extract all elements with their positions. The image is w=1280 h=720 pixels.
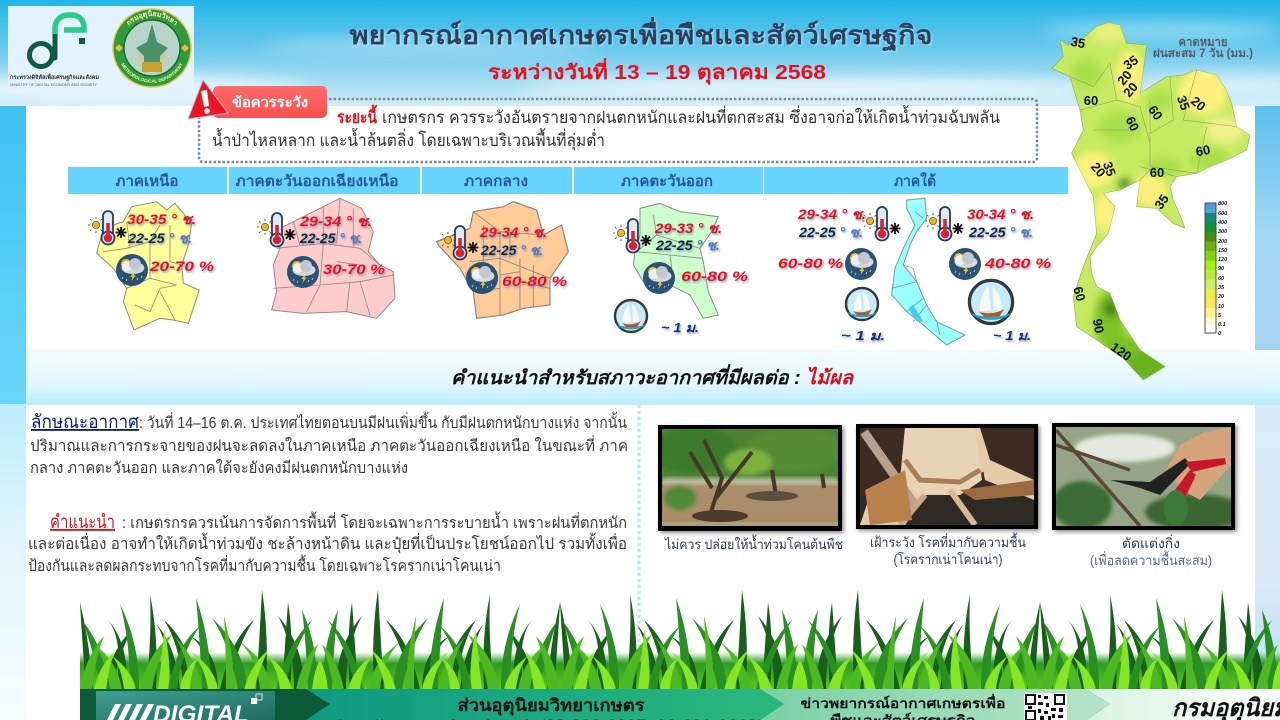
- icon: thermometer: [440, 226, 478, 260]
- map: south: [892, 198, 965, 345]
- warning tag: [213, 86, 327, 118]
- contour labels: 120: [1108, 339, 1134, 364]
- weather text block: ปริมาณและการกระจายของฝนจะลดลงในภาคเหนือ ภาคตะวันออกเฉียงเหนือ ในขณะที่ ภาค: [30, 435, 628, 455]
- map: north: [97, 202, 199, 330]
- contour labels: 35: [1174, 93, 1193, 112]
- icon: thermometer: [257, 213, 296, 246]
- icon: rain: [116, 254, 148, 286]
- photo: pruning branch: [1052, 423, 1245, 530]
- legend scale: 60: [1218, 276, 1224, 282]
- region header table: ภาคกลาง: [464, 173, 528, 190]
- legend scale: 0.1: [1218, 322, 1226, 328]
- legend scale: 150: [1218, 248, 1227, 254]
- photo captions: ตัดแต่งกิ่ง: [1122, 534, 1180, 551]
- contour labels: 60: [1070, 285, 1089, 303]
- logo: digital economy ministry: MINISTRY OF DIGITAL ECONOMY AND SOCIETY: [10, 83, 97, 87]
- temperature northeast: 29-34 ° ช.: [299, 214, 372, 229]
- legend scale: 10: [1218, 304, 1224, 310]
- temperature central: 29-34 ° ช.: [479, 225, 547, 240]
- warning text: ระยะนี้: [337, 104, 377, 127]
- rain chance central: 60-80 %: [502, 274, 567, 289]
- contour labels: 60: [1150, 165, 1164, 180]
- region header table: [68, 167, 1068, 194]
- panel: south region: [778, 198, 1051, 345]
- panel: northeast region: [257, 198, 395, 318]
- temperature east: [654, 221, 722, 253]
- contour labels: 90: [1090, 317, 1107, 334]
- contour labels: 60: [1084, 93, 1098, 108]
- grass strip: [80, 590, 1280, 690]
- photo captions: (โรครากเน่าโคนเน่า): [894, 551, 1002, 567]
- recommendation heading band: คำแนะนำสำหรับสภาวะอากาศที่มีผลต่อ : ไม้ผล: [451, 364, 854, 389]
- weather text block: [30, 411, 628, 477]
- contour labels: 35: [1120, 52, 1141, 73]
- weather text block: ลักษณะอากาศ: [31, 411, 139, 432]
- warning text: น้ำป่าไหลหลาก และน้ำล้นตลิ่ง โดยเฉพาะบริเวณพื้นที่ลุ่มต่ำ: [212, 128, 605, 151]
- legend scale: [1205, 201, 1227, 337]
- legend scale: 20: [1217, 294, 1224, 300]
- temperature south east: [967, 207, 1034, 240]
- footer news text: [800, 693, 1006, 720]
- temperature central: 22-25 ° ช.: [480, 243, 543, 258]
- legend scale: 600: [1218, 211, 1227, 217]
- panel: central region: [437, 202, 568, 318]
- photo captions: [664, 532, 1212, 568]
- temperature east: 22-25 ° ช.: [655, 238, 720, 253]
- icon: boat: [615, 300, 647, 332]
- legend scale: 200: [1217, 239, 1227, 245]
- contour labels: 60: [1194, 142, 1211, 159]
- rain chance northeast: 30-70 %: [323, 262, 385, 277]
- icon: rain east: [949, 248, 981, 280]
- photo: rotten roots: [856, 424, 1038, 529]
- QR code: [1024, 693, 1067, 720]
- logos panel: [8, 6, 194, 88]
- temperature northeast: 22-25 ° ช.: [299, 231, 362, 246]
- contour labels: 35: [1070, 34, 1087, 51]
- rain chance south west: 60-80 %: [778, 256, 843, 271]
- icon: warning triangle: [188, 80, 228, 119]
- rain chance south east: 40-80 %: [984, 256, 1051, 271]
- temperature north: 22-25 ° ช.: [127, 231, 192, 246]
- legend scale: 5: [1218, 313, 1222, 319]
- temperature south east: 22-25 ° ช.: [968, 225, 1033, 240]
- footer bar: [80, 689, 1280, 720]
- contour labels: 35: [1151, 191, 1172, 212]
- temperature northeast: [299, 214, 372, 246]
- map heading: ฝนสะสม 7 วัน (มม.): [1153, 47, 1253, 60]
- icon: thermometer west: [862, 207, 900, 240]
- weather text block: : วันที่ 14–16 ต.ค. ประเทศไทยตอนบนมีฝนเพิ่มขึ้น กับมีฝนตกหนักบางแห่ง จากนั้น: [139, 411, 627, 432]
- photo captions: (เพื่อลดความชื้นสะสม): [1090, 550, 1212, 568]
- legend scale: 800: [1218, 201, 1227, 207]
- map: northeast: [272, 198, 395, 318]
- icon: thermometer: [88, 211, 126, 244]
- legend scale: 90: [1218, 266, 1224, 272]
- region header table: ภาคเหนือ: [116, 173, 178, 190]
- legend scale: 35: [1218, 285, 1225, 291]
- rain chance east: 60-80 %: [681, 269, 748, 284]
- logo: digital economy ministry: กระทรวงดิจิทัลเพื่อเศรษฐกิจและสังคม: [10, 73, 99, 81]
- map: accumulated rainfall: [1052, 23, 1253, 382]
- contour labels: 60: [1145, 102, 1166, 123]
- contour labels: 20: [1188, 93, 1209, 114]
- temperature south east: 30-34 ° ช.: [967, 207, 1034, 222]
- wave height east: ~ 1 ม.: [661, 321, 699, 335]
- contour labels: 20: [1088, 159, 1109, 180]
- icon: rain west: [845, 248, 877, 280]
- region header table: ภาคใต้: [894, 172, 936, 190]
- icon: boat east: [969, 280, 1013, 324]
- icon: thermometer: [613, 219, 652, 252]
- temperature south west: 29-34 ° ช.: [797, 207, 866, 222]
- legend scale: 120: [1218, 257, 1227, 263]
- panel: east region: [613, 203, 748, 335]
- temperature south west: 22-25 ° ช.: [798, 225, 863, 240]
- region header table: ภาคตะวันออก: [621, 173, 713, 190]
- icon: rain: [466, 262, 498, 294]
- temperature north: [127, 212, 196, 246]
- subtitle: date range: ระหว่างวันที่ 13 – 19 ตุลาคม 2568: [488, 57, 826, 85]
- warning text: [212, 104, 1000, 151]
- rain chance north: 20-70 %: [149, 259, 214, 274]
- recommendation text block: [28, 511, 627, 575]
- legend scale: 400: [1217, 220, 1227, 226]
- map heading: [1153, 35, 1253, 60]
- map heading: คาดหมาย: [1178, 35, 1228, 49]
- wave height south east: ~ 1 ม.: [993, 329, 1031, 343]
- icon: thermometer east: [925, 207, 964, 240]
- recommendation text block: : เกษตรกรควรเน้นการจัดการพื้นที่ โดยจะเฉพาะการระบายน้ำ เพราะฝนที่ตกหนัก: [122, 511, 627, 532]
- recommendation text block: ป้องกันและลดผลกระทบจากโรคที่มากับความชื้น โดยเฉพาะโรครากเน่าโคนเน่า: [28, 554, 501, 575]
- icon: boat west: [846, 288, 878, 320]
- photo: flooded orchard: [653, 425, 843, 531]
- contour labels: 20: [1114, 67, 1135, 88]
- logo: digital economy ministry: [10, 15, 99, 87]
- temperature east: 29-33 ° ช.: [654, 221, 722, 236]
- panel: north region: [88, 202, 214, 330]
- logo: meteorological department emblem: [112, 8, 192, 88]
- icon: rain: [643, 262, 675, 294]
- logo: meteorological department emblem: METEOROLOGICAL DEPARTMENT: [121, 62, 182, 83]
- warning panel: [188, 80, 1037, 162]
- title: พยากรณ์อากาศเกษตรเพื่อพืชและสัตว์เศรษฐกิจ: [350, 16, 932, 53]
- map: central: [437, 202, 568, 318]
- region header table: ภาคตะวันออกเฉียงเหนือ: [236, 173, 398, 190]
- warning tag: ข้อควรระวัง: [232, 94, 308, 110]
- recommendation text block: และต่อเนื่อง อาจทำให้เกิดน้ำท่วมขัง ชะล้างหน้าดิน และปุ๋ยที่เป็นประโยชน์ออกไป รวมทั้งเพื่อ: [28, 532, 627, 554]
- footer news text: ข่าวพยากรณ์อากาศเกษตรเพื่อ: [800, 693, 1006, 711]
- weather text block: กลาง ภาคตะวันออก และภาคใต้จะยังคงมีฝนตกหนักบางแห่ง: [30, 459, 408, 477]
- photo captions: ไม่ควร ปล่อยให้น้ำท่วมโคนต้นพืช: [664, 534, 843, 552]
- temperature north: 30-35 ° ช.: [127, 212, 196, 227]
- legend scale: 0: [1218, 331, 1221, 337]
- contour labels: [1070, 34, 1211, 364]
- logo: meteorological department emblem: กรมอุตุนิยมวิทยา: [126, 10, 177, 26]
- recommendation text block: คำแนะนำ: [50, 511, 115, 532]
- icon: rain: [287, 256, 319, 288]
- warning text: เกษตรกร ควรระวังอันตรายจากฝนตกหนักและฝนที่ตกสะสม ซึ่งอาจก่อให้เกิดน้ำท่วมฉับพลัน: [382, 105, 1000, 127]
- wave height south west: ~ 1 ม.: [841, 329, 885, 343]
- legend scale: 300: [1218, 229, 1227, 235]
- map: east: [633, 203, 718, 318]
- contour labels: 35: [1100, 159, 1119, 178]
- contour labels: 20: [1120, 79, 1141, 100]
- footer agency heading: ส่วนอุตุนิยมวิทยาเกษตร: [458, 696, 645, 716]
- temperature central: [479, 225, 547, 258]
- photo captions: เฝ้าระวัง โรคที่มากับความชื้น: [870, 532, 1026, 550]
- temperature south west: [797, 207, 866, 240]
- contour labels: 60: [1123, 114, 1142, 134]
- digital badge: [96, 691, 275, 720]
